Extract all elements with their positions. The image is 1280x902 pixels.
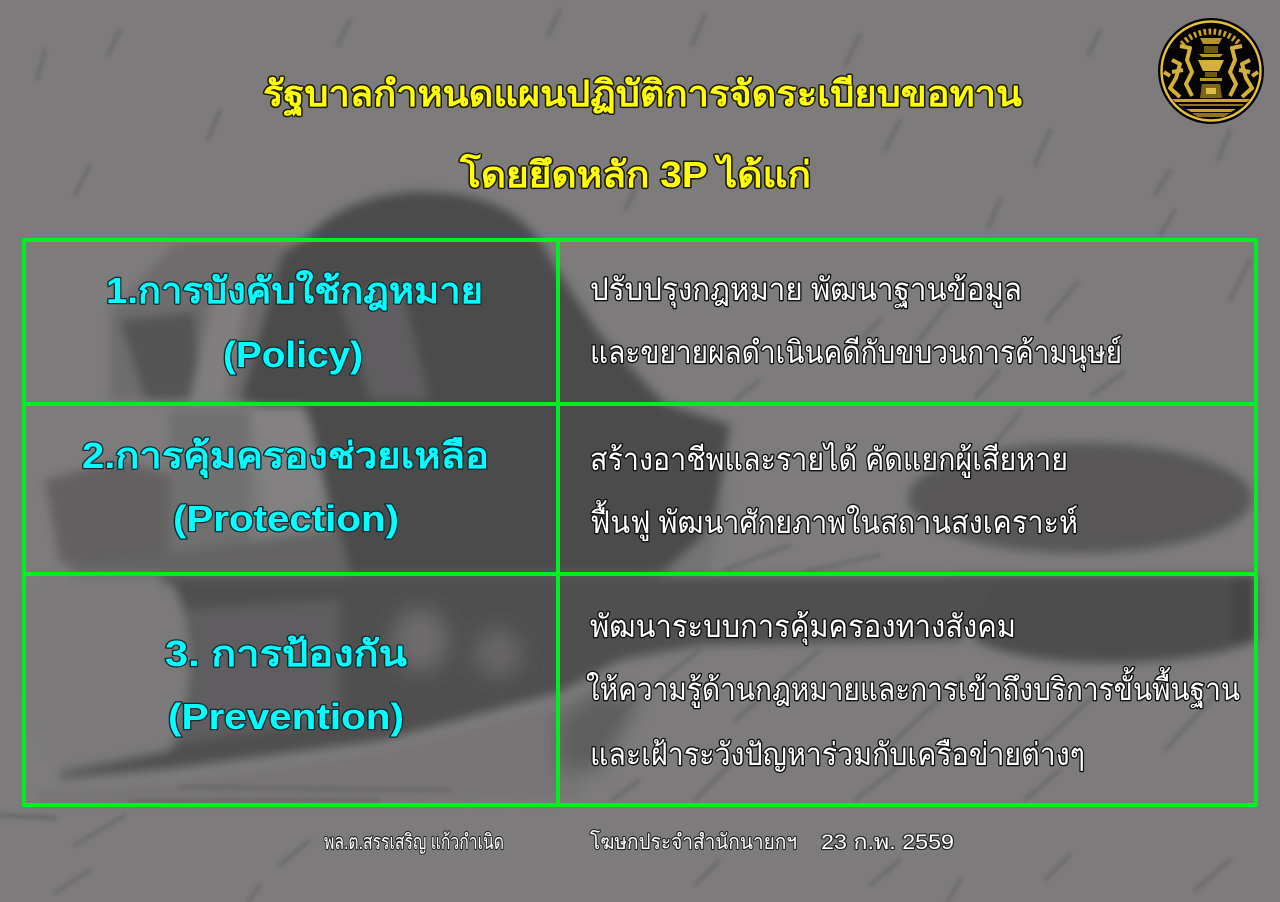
left lion bbox=[1164, 46, 1192, 97]
row 3 heading: Prevention: (Prevention) bbox=[168, 696, 404, 737]
title line 2: โดยยึดหลัก 3P ได้แก่ bbox=[459, 153, 811, 195]
row 1 description: และขยายผลดำเนินคดีกับขบวนการค้ามนุษย์ bbox=[590, 335, 1122, 372]
row 1 heading: Policy: 1.การบังคับใช้กฎหมาย bbox=[106, 269, 483, 311]
head silhouette bbox=[225, 192, 730, 574]
row 3 description bbox=[586, 609, 1240, 772]
right lion bbox=[1230, 46, 1258, 97]
row 1 description bbox=[590, 272, 1122, 372]
book bbox=[38, 690, 600, 805]
soft hand blobs bbox=[392, 608, 640, 770]
footer credit: 23 ก.พ. 2559 bbox=[821, 831, 954, 854]
row 3 description: พัฒนาระบบการคุ้มครองทางสังคม bbox=[590, 609, 1016, 646]
footer credit: โฆษกประจำสำนักนายกฯ bbox=[590, 830, 797, 854]
row 2 heading: Protection: (Protection) bbox=[173, 498, 399, 539]
flame arc bbox=[1182, 32, 1240, 44]
forearm shade on the upper left bbox=[110, 243, 285, 400]
sleeve band bbox=[60, 576, 1000, 778]
table grid bbox=[24, 240, 1256, 805]
row 3 description: และเฝ้าระวังปัญหาร่วมกับเครือข่ายต่างๆ bbox=[590, 737, 1085, 772]
lower face shade bbox=[45, 460, 170, 563]
row 1 heading: Policy: (Policy) bbox=[223, 334, 363, 375]
row 2 heading: Protection bbox=[82, 435, 489, 539]
title bbox=[263, 73, 1022, 195]
row 1 heading: Policy bbox=[106, 269, 483, 375]
row 2 description: สร้างอาชีพและรายได้ คัดแยกผู้เสียหาย bbox=[590, 442, 1068, 478]
footer credit: พล.ต.สรรเสริญ แก้วกำเนิด bbox=[324, 831, 504, 854]
row 3 heading: Prevention bbox=[165, 633, 407, 737]
bowl bbox=[908, 443, 1252, 553]
row 1 description: ปรับปรุงกฎหมาย พัฒนาฐานข้อมูล bbox=[590, 272, 1022, 309]
footer credit bbox=[324, 830, 954, 854]
row 2 description bbox=[590, 442, 1078, 541]
title line 1: รัฐบาลกำหนดแผนปฏิบัติการจัดระเบียบขอทาน bbox=[263, 73, 1022, 117]
row 3 heading: Prevention: 3. การป้องกัน bbox=[165, 633, 407, 674]
icon: government seal bbox=[1158, 18, 1264, 124]
ceremonial urn bbox=[1198, 38, 1224, 98]
stepped base bbox=[1172, 99, 1250, 117]
arm bbox=[27, 577, 189, 772]
row 2 heading: Protection: 2.การคุ้มครองช่วยเหลือ bbox=[82, 435, 489, 479]
row 2 description: ฟื้นฟู พัฒนาศักยภาพในสถานสงเคราะห์ bbox=[590, 500, 1078, 541]
